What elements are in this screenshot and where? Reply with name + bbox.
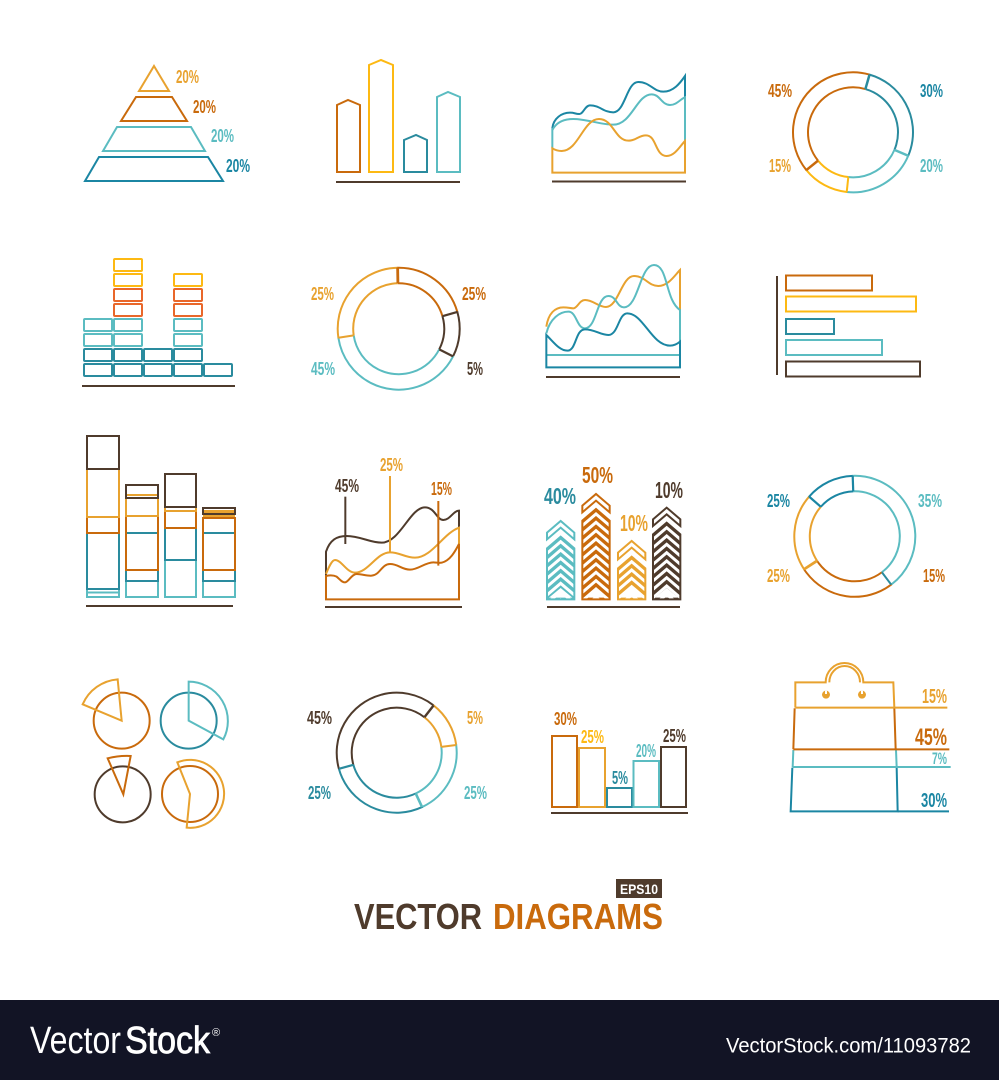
axis <box>776 276 778 375</box>
baseline <box>552 180 686 182</box>
label: 45%: 45% <box>335 476 359 496</box>
logo: VectorStock: Vector <box>30 1020 121 1062</box>
curves <box>546 265 680 367</box>
donut rings <box>769 48 937 217</box>
label: 45%: 45% <box>768 81 792 101</box>
label: 5%: 5% <box>467 359 483 379</box>
label: 25% amber: 25% <box>767 566 790 586</box>
chart: area lines row two <box>546 265 680 377</box>
label: 20%: 20% <box>636 741 656 761</box>
chart: donut row two <box>311 247 486 411</box>
column 5 <box>204 364 232 376</box>
column: light teal <box>634 761 659 807</box>
column 4 <box>174 274 202 376</box>
label: 10% amber: 10% <box>620 510 648 536</box>
bar: orange <box>337 100 360 172</box>
chart: pyramid <box>85 66 250 181</box>
pyramid tier: second <box>121 97 187 121</box>
bar: orange <box>786 276 872 290</box>
label: 20%: 20% <box>920 156 943 176</box>
column: amber <box>579 748 605 807</box>
label: 20% amber: 20% <box>176 67 199 87</box>
arrows <box>546 492 682 600</box>
column 3 <box>165 474 196 597</box>
chart: labelled columns <box>551 709 688 813</box>
donut rings <box>769 451 940 622</box>
label: 50%: 50% <box>582 462 613 488</box>
curves and pointers <box>326 476 459 599</box>
pyramid tier: top triangle <box>139 66 169 91</box>
column 1 <box>87 436 119 597</box>
bar: teal <box>404 135 427 172</box>
chart: shopping bag <box>791 663 951 812</box>
label: 25% teal: 25% <box>308 783 331 803</box>
label: 25% light teal: 25% <box>464 783 487 803</box>
chart: block equalizer <box>82 259 235 386</box>
chart: four exploded pies <box>83 679 228 828</box>
column: teal <box>607 788 632 807</box>
chart: donut top right <box>768 48 943 217</box>
bar: light teal <box>786 340 882 355</box>
curves <box>552 76 685 173</box>
bar: yellow <box>786 296 916 312</box>
label: 15%: 15% <box>922 686 947 708</box>
chart: chevron arrows <box>544 467 683 608</box>
chart: annotated area lines <box>325 455 462 607</box>
title <box>354 896 663 937</box>
footer bar: Stock <box>125 1020 211 1062</box>
label: 25% yellow: 25% <box>581 727 604 747</box>
chart: house-top bar chart <box>336 60 460 182</box>
bar: brown <box>786 362 920 376</box>
label: 15%: 15% <box>431 479 452 499</box>
label: 25%: 25% <box>380 455 403 475</box>
donut rings <box>317 247 481 411</box>
pies <box>83 679 228 828</box>
label: 30%: 30% <box>921 790 947 812</box>
bar: teal <box>786 319 834 334</box>
baseline <box>547 606 680 608</box>
bar: light teal <box>437 92 460 172</box>
donut rings <box>312 668 481 837</box>
label: 45%: 45% <box>915 724 947 751</box>
image id: VectorStock.com/11093782 <box>726 1034 971 1058</box>
label: 35%: 35% <box>918 491 942 511</box>
chart: area lines top <box>552 76 686 182</box>
chart: horizontal bars <box>777 276 920 376</box>
baseline <box>86 605 233 607</box>
label: 15%: 15% <box>923 566 945 586</box>
title: DIAGRAMS <box>493 896 663 937</box>
column: orange <box>552 736 577 807</box>
baseline <box>551 812 688 814</box>
chart: stacked columns <box>86 436 235 606</box>
label: 25% brown: 25% <box>663 726 686 746</box>
badge: EPS10: EPS10 <box>620 881 658 897</box>
pyramid tier: third <box>103 127 205 151</box>
label: 20% teal: 20% <box>226 156 250 176</box>
label: 40%: 40% <box>544 483 576 509</box>
label: 20% light teal: 20% <box>211 126 234 146</box>
chart: donut row three <box>767 451 945 622</box>
column 1 <box>84 319 112 376</box>
label: 5%: 5% <box>612 768 628 788</box>
baseline <box>82 385 235 387</box>
label: 30%: 30% <box>920 81 943 101</box>
label: 10% brown: 10% <box>655 477 683 503</box>
column: brown <box>661 747 686 807</box>
label: 7%: 7% <box>932 749 947 768</box>
column 3 <box>144 349 172 376</box>
chart: donut bottom <box>307 668 487 837</box>
label: 45%: 45% <box>311 359 335 379</box>
label: 25% teal: 25% <box>767 491 790 511</box>
baseline <box>336 181 460 183</box>
baseline <box>325 606 462 608</box>
baseline <box>546 376 680 378</box>
column 2 <box>114 259 142 376</box>
bar: yellow <box>369 60 393 172</box>
column 4 <box>203 508 235 597</box>
title: VECTOR <box>354 896 482 937</box>
label: 45%: 45% <box>307 708 332 728</box>
label: 30%: 30% <box>554 709 577 729</box>
label: 25% amber: 25% <box>311 284 334 304</box>
footer bar <box>0 1000 999 1080</box>
label: 25% orange: 25% <box>462 284 486 304</box>
label: 20% orange: 20% <box>193 97 216 117</box>
footer bar: ® <box>212 1027 220 1039</box>
bag outline <box>791 663 951 811</box>
label: 15%: 15% <box>769 156 791 176</box>
column 2 <box>126 485 158 597</box>
label: 5%: 5% <box>467 708 483 728</box>
pyramid tier: base <box>85 157 223 181</box>
